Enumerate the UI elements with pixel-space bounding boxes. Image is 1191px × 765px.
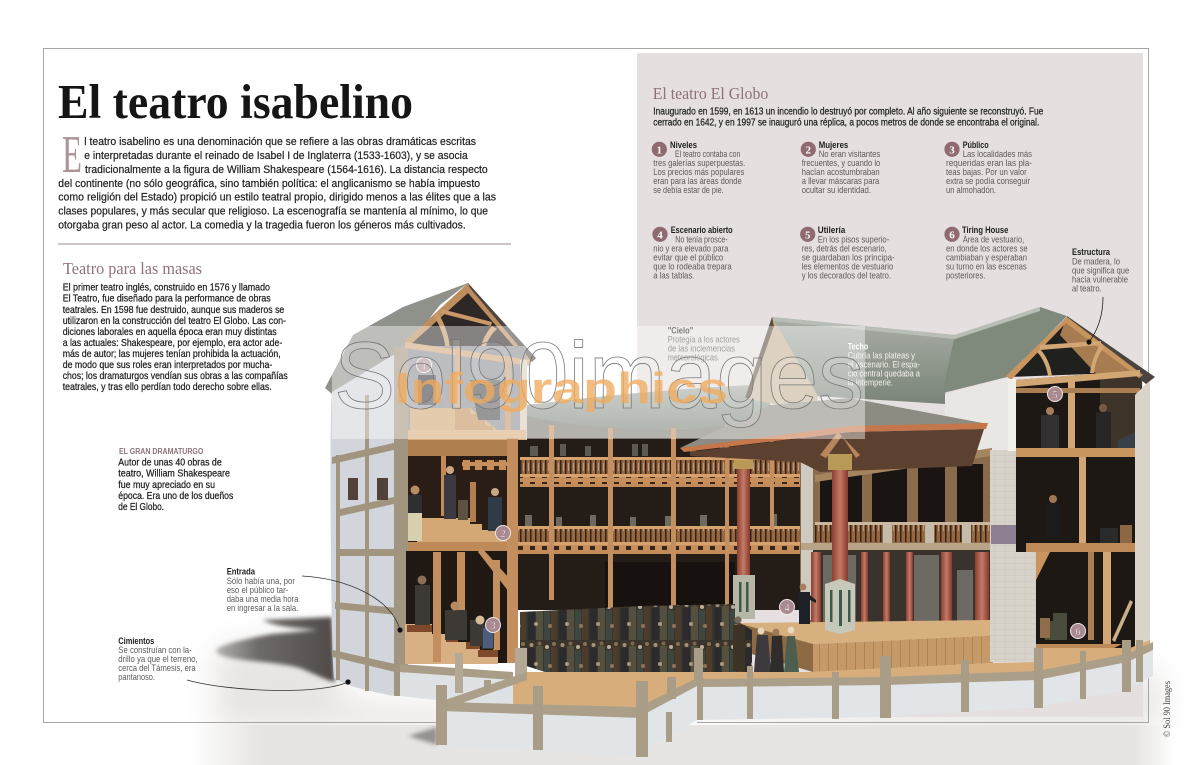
- credit: © Sol 90 Images: [1162, 681, 1172, 737]
- watermark: Sol90images: [334, 323, 864, 429]
- item 6: Tiring House: Área de vestuario,: [963, 233, 1024, 244]
- callout: Estructura: [1072, 247, 1129, 293]
- item 3: Público: Las localidades más: [963, 148, 1032, 159]
- section: Teatro para las masas: teatrales, y tras ello perdían todo derecho sobre ellas.: [63, 382, 272, 393]
- right fence: [694, 640, 1153, 720]
- back galleries: [518, 420, 803, 610]
- item 6: Tiring House: [944, 225, 1028, 280]
- left tower drum wall: [331, 346, 408, 696]
- item 2: Mujeres: ocultar su identidad.: [802, 184, 871, 195]
- leader line: Estructura: [1086, 297, 1103, 345]
- item 1: Niveles: 1: [657, 144, 662, 156]
- item 2: Mujeres: 2: [806, 144, 812, 156]
- panel text: El teatro El Globo: Inaugurado en 1599, en 1613 un incendio lo destruyó por completo. Al año siguiente se reconstruyó. Fue: [653, 106, 1044, 117]
- callout: El gran dramaturgo: época. Era uno de los dueños: [118, 491, 233, 502]
- front stage column: [825, 454, 855, 634]
- item 5: Utilería: y los decorados del teatro.: [802, 269, 891, 280]
- marker 1: [416, 358, 432, 372]
- item 5: Utilería: En los pisos superio-: [818, 233, 889, 244]
- callout: Entrada: Entrada: [227, 566, 256, 576]
- item 3: Público: requeridas eran las pla-: [946, 157, 1032, 168]
- item 1: Niveles: [652, 140, 745, 195]
- item 2: Mujeres: hacían acostumbraban: [802, 166, 880, 177]
- stage roof: [680, 398, 988, 472]
- callout: Entrada: en ingresar a la sala.: [227, 602, 298, 613]
- wall timbers: [332, 346, 408, 696]
- item 3: Público: 3: [949, 144, 955, 156]
- ground floor: [440, 640, 1150, 707]
- section heading: Teatro para las masas: [63, 259, 202, 278]
- section: Teatro para las masas: más de autor; las mujeres tenían prohibida la actuación,: [63, 349, 281, 360]
- stage: [738, 620, 993, 672]
- marker 3: 3: [490, 621, 496, 632]
- marker 3: [486, 618, 500, 632]
- callout: Techo: Cubría las plateas y: [848, 349, 915, 360]
- callout: Entrada: daba una media hora: [227, 593, 299, 604]
- back gallery roof: [527, 384, 770, 440]
- leader line: Entrada: [302, 576, 403, 633]
- callout: El gran dramaturgo: de El Globo.: [118, 502, 164, 513]
- figure on left: [408, 495, 422, 513]
- item 3: Público: [944, 140, 1032, 195]
- section: Teatro para las masas: a las actuales: Shakespeare, por ejemplo, era actor ade-: [63, 338, 282, 349]
- panel: El teatro El Globo background: [637, 53, 1143, 717]
- intro text block: [58, 126, 497, 232]
- callout: Cimientos: Se construían con la-: [118, 644, 192, 655]
- upper room of tower: [405, 342, 530, 440]
- callout: El gran dramaturgo: [118, 446, 233, 513]
- section: Teatro para las masas: [63, 259, 288, 393]
- gallery posts: [549, 420, 774, 608]
- callout: Entrada: Sólo había una, por: [227, 575, 295, 586]
- item 6: Tiring House: posteriores.: [946, 269, 985, 280]
- callout: Estructura: hacía vulnerable: [1072, 273, 1128, 284]
- item 5: Utilería: Utilería: [818, 225, 846, 235]
- front deck fence: [436, 672, 697, 757]
- item 6: Tiring House: en donde los actores se: [946, 242, 1028, 253]
- item 1: Niveles: se debía estar de pie.: [653, 184, 724, 195]
- item 5: Utilería: [800, 225, 895, 280]
- item 2: Mujeres: [801, 140, 881, 195]
- callout: Cielo: meteorológicas.: [668, 352, 720, 363]
- callout: Techo: cio central quedaba a: [848, 367, 921, 378]
- intro text block: tradicionalmente a la figura de William Shakespeare (1564-1616). La distancia respecto: [85, 164, 488, 176]
- number markers: [416, 358, 1086, 638]
- marker 5: [1048, 386, 1062, 402]
- marker 2: [496, 526, 510, 540]
- callout: Techo: Techo: [848, 341, 869, 351]
- marker 4: [780, 600, 794, 614]
- item 1: Niveles: El teatro contaba con: [675, 148, 740, 159]
- item 1: Niveles: Los precios más populares: [653, 166, 745, 177]
- middle room: [1079, 457, 1086, 543]
- stage gable: [745, 317, 818, 412]
- item 2: Mujeres: No eran visitantes: [819, 148, 881, 159]
- section: Teatro para las masas: El Teatro, fue diseñado para la performance de obras: [63, 294, 271, 305]
- left tower roof: [325, 283, 536, 394]
- item 6: Tiring House: su turno en las escenas: [946, 260, 1027, 271]
- wall windows: [348, 478, 388, 500]
- section: Teatro para las masas: utilizaron en la construcción del teatro El Globo. Las con-: [63, 316, 286, 327]
- item 5: Utilería: se guardaban los principa-: [802, 251, 895, 262]
- section: Teatro para las masas: diciones laborales en aquella época eran muy distintas: [63, 327, 277, 338]
- intro text block: clases populares, y más secular que religioso. La escenografía se mantenía al mínimo, lo que: [58, 206, 488, 218]
- standing crowd: [520, 604, 799, 672]
- callout: Estructura: al teatro.: [1072, 282, 1102, 293]
- intro text block: del continente (no sólo geográfica, sino también política: el anglicanismo se había impuesto: [58, 178, 480, 190]
- marker 6: 6: [1076, 627, 1080, 638]
- right wall: [1135, 380, 1150, 655]
- intro text block: e interpretadas durante el reinado de Isabel I de Inglaterra (1533-1603), y se asocia: [84, 150, 468, 162]
- section: Teatro para las masas: teatrales. En 1598 fue destruido, aunque sus maderos se: [63, 305, 285, 316]
- section: Teatro para las masas: El primer teatro inglés, construido en 1576 y llamado: [63, 283, 270, 294]
- main thatched roof: [745, 307, 1067, 412]
- item 5: Utilería: les elementos de vestuario: [802, 260, 893, 271]
- item 5: Utilería: 5: [805, 229, 811, 241]
- callout: Techo: la intemperie.: [848, 376, 893, 387]
- upper room details: [1100, 372, 1142, 448]
- front wall below tower: [400, 648, 527, 705]
- item 4: Escenario abierto: Escenario abierto: [671, 225, 733, 235]
- right building rooms: [1016, 370, 1150, 655]
- item 1: Niveles: eran para las áreas donde: [653, 175, 742, 186]
- leader line: Cimientos: [187, 679, 351, 690]
- callout: Cimientos: pantanoso.: [118, 671, 155, 682]
- marker 6: [1070, 624, 1086, 638]
- callout: Entrada: eso el público tar-: [227, 584, 288, 595]
- callout: Estructura: que significa que: [1072, 264, 1129, 275]
- back stage column: [733, 460, 755, 619]
- panel heading: El teatro El Globo: [653, 84, 768, 103]
- item 3: Público: Público: [963, 140, 989, 150]
- second level of tower: [408, 440, 516, 551]
- marker 4: 4: [784, 603, 790, 614]
- callout: Cimientos: [118, 636, 198, 682]
- intro text block: l teatro isabelino es una denominación que se refiere a las obras dramáticas escritas: [84, 136, 477, 148]
- item 4: Escenario abierto: No tenía prosce-: [675, 233, 728, 244]
- item 4: Escenario abierto: [652, 225, 733, 280]
- callout: Techo: [848, 341, 921, 387]
- title: El teatro isabelino: [58, 74, 413, 129]
- marker 1: 1: [422, 361, 426, 372]
- item 4: Escenario abierto: nio y era elevado para: [653, 242, 729, 253]
- illustration: Globe theatre cutaway: [325, 283, 1155, 757]
- balcony: [815, 522, 990, 525]
- callout: Cielo: "Cielo": [668, 325, 693, 335]
- item 1: Niveles: tres galerías superpuestas.: [653, 157, 745, 168]
- wall pillar: [990, 450, 1036, 662]
- intro text block: como religión del Estado) propició un estilo teatral propio, dirigido menos a las élites que a las: [58, 192, 497, 204]
- upper openings: [820, 464, 983, 524]
- callout: Cimientos: cerca del Támesis, era: [118, 662, 196, 673]
- lower wall and doors: [813, 550, 991, 635]
- callout: Cielo: Protegía a los actores: [668, 334, 740, 345]
- watermark: Infographics: [395, 364, 728, 413]
- figures by stage: [733, 616, 799, 672]
- ground shadow: [216, 617, 437, 745]
- lower room: [1088, 552, 1094, 640]
- item 4: Escenario abierto: que lo rodeaba trepara: [653, 260, 732, 271]
- tiring house facade: [800, 448, 992, 640]
- actor on stage: [799, 584, 816, 624]
- right gable truss: [1006, 316, 1155, 451]
- marker 5: 5: [1052, 390, 1058, 401]
- callout: El gran dramaturgo: fue muy apreciado en su: [118, 480, 215, 491]
- item 3: Público: un almohadón.: [946, 184, 996, 195]
- intro text block: otorgaba gran peso al actor. La comedia y la tragedia fueron los géneros más cultivados.: [58, 220, 466, 232]
- item 4: Escenario abierto: a las tablas.: [653, 269, 694, 280]
- item 2: Mujeres: frecuentes, y cuando lo: [802, 157, 880, 168]
- callout: Cimientos: Cimientos: [118, 636, 154, 646]
- callout: Techo: el escenario. El espa-: [848, 358, 920, 369]
- callout: Cielo: de las inclemencias: [668, 343, 735, 354]
- callout: Estructura: Estructura: [1072, 247, 1111, 257]
- section: Teatro para las masas: chos; los dramaturgos vendían sus obras a las compañías: [63, 371, 288, 382]
- item 5: Utilería: res, detrás del escenario,: [802, 242, 887, 253]
- item 3: Público: teas bajas. Por un valor: [946, 166, 1027, 177]
- white wall of tiring house: [945, 378, 1016, 460]
- item 3: Público: extra se podía conseguir: [946, 175, 1030, 186]
- callout: Entrada: [227, 566, 299, 613]
- item 4: Escenario abierto: evitar que el público: [653, 251, 723, 262]
- section: Teatro para las masas: de modo que sus roles eran interpretados por mucha-: [63, 360, 272, 371]
- ground level seating: [405, 438, 518, 664]
- callout: El gran dramaturgo: EL GRAN DRAMATURGO: [119, 446, 204, 456]
- panel text: El teatro El Globo: cerrado en 1642, y en 1997 se inauguró una réplica, a pocos metros de donde se encontraba el original.: [653, 118, 1039, 129]
- marker 2: 2: [500, 529, 506, 540]
- item 6: Tiring House: cambiaban y esperaban: [946, 251, 1027, 262]
- floor shade: [190, 630, 1175, 765]
- item 6: Tiring House: Tiring House: [962, 225, 1008, 235]
- callout: El gran dramaturgo: Autor de unas 40 obras de: [118, 458, 222, 469]
- item 2: Mujeres: Mujeres: [819, 140, 848, 150]
- item 4: Escenario abierto: 4: [657, 229, 663, 241]
- callout: El gran dramaturgo: teatro, William Shakespeare: [118, 469, 230, 480]
- item 6: Tiring House: 6: [949, 229, 955, 241]
- callout: Estructura: De madera, lo: [1072, 255, 1120, 266]
- callout: Cielo: [668, 325, 740, 363]
- item 1: Niveles: Niveles: [670, 140, 697, 150]
- figures upper: [1041, 415, 1059, 448]
- item 2: Mujeres: a llevar máscaras para: [802, 175, 880, 186]
- drop cap: E: [62, 126, 82, 184]
- callout: Cimientos: drillo ya que el terreno,: [118, 653, 198, 664]
- panel text: El teatro El Globo: [653, 84, 1044, 129]
